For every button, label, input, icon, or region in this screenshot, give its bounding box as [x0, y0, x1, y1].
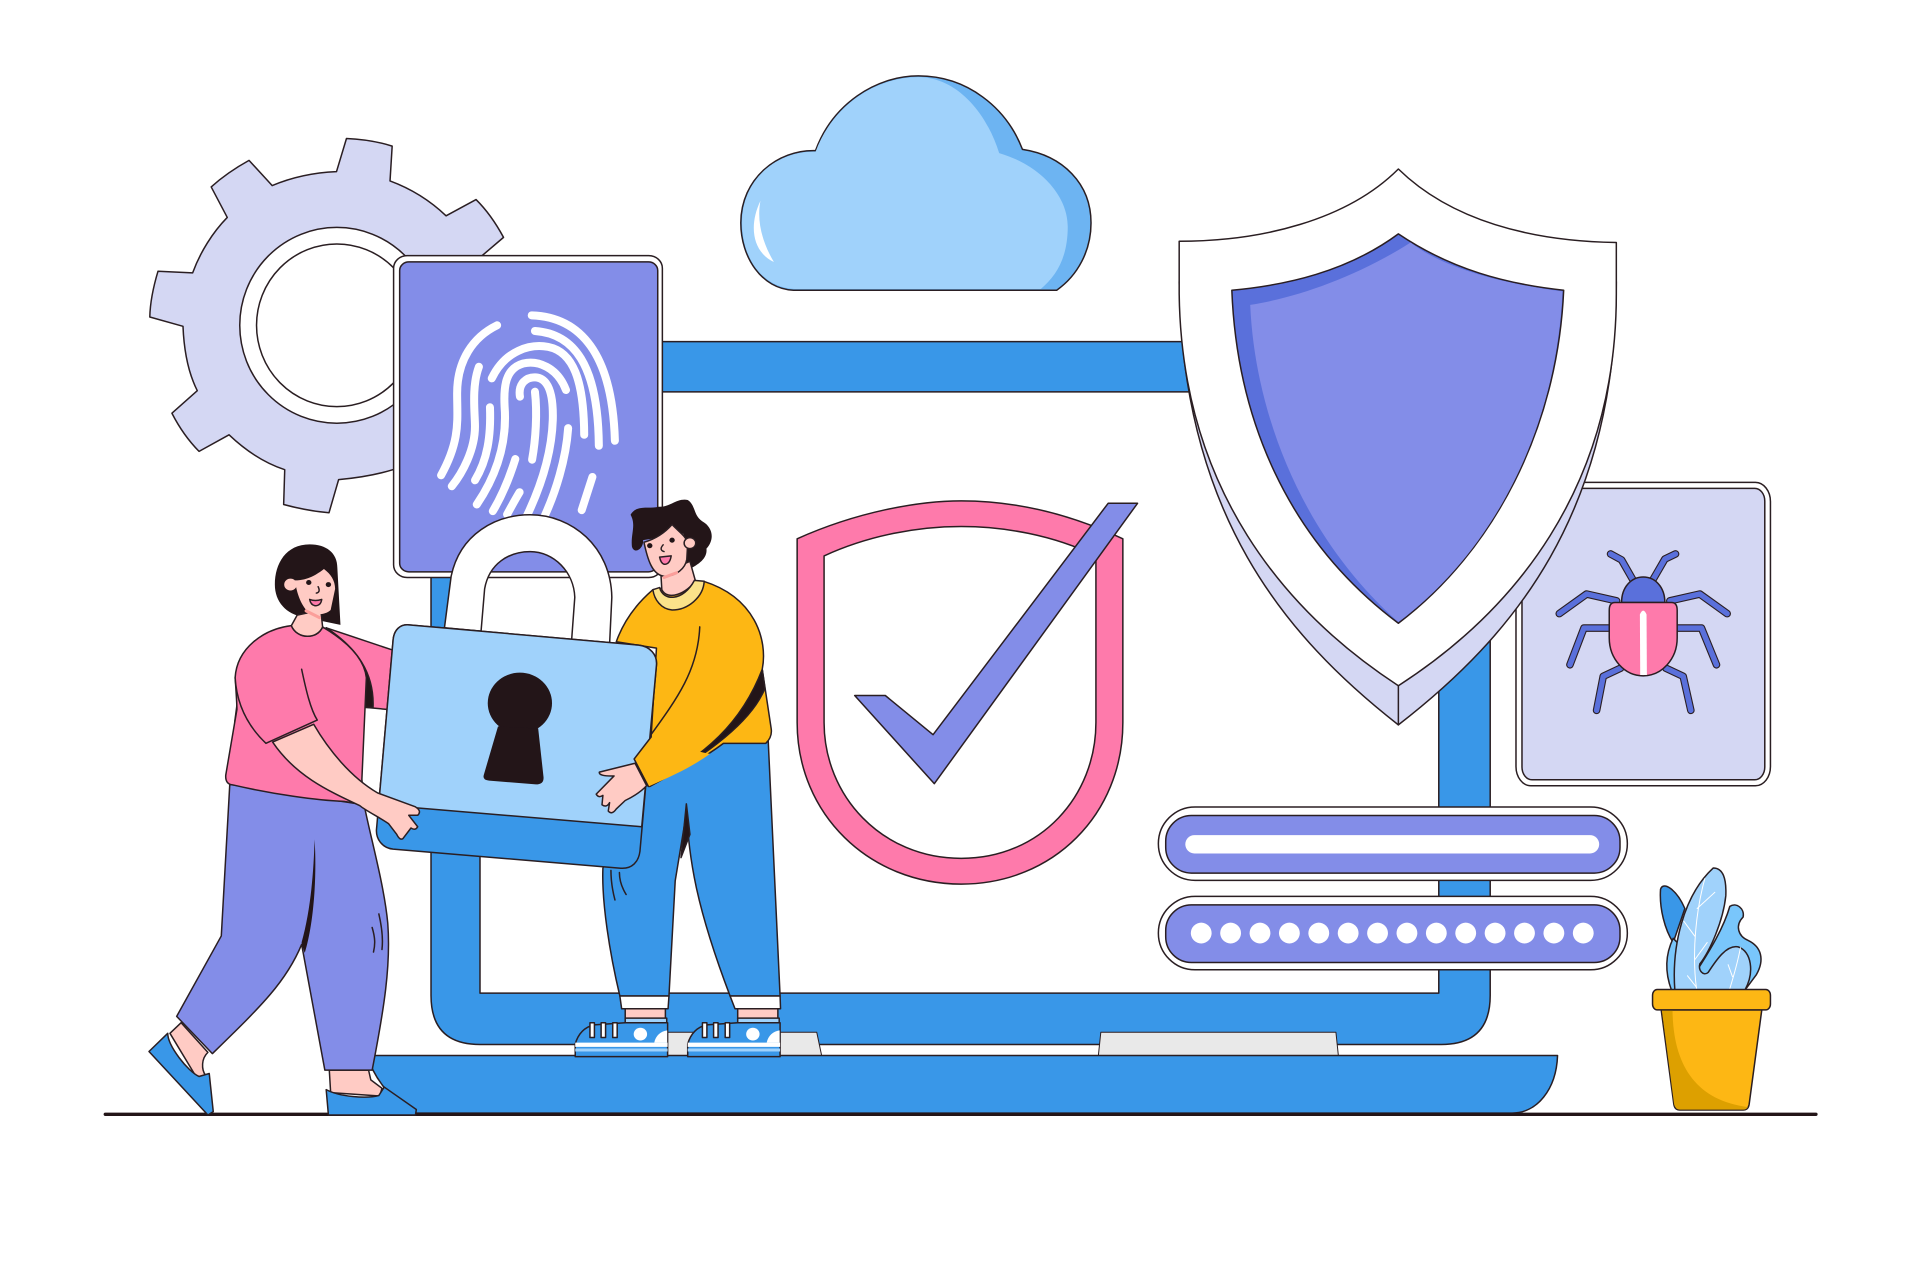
collar	[653, 580, 704, 610]
pink shield with check	[797, 501, 1138, 884]
trousers crease	[302, 839, 315, 953]
right shoe	[688, 1018, 780, 1057]
woman mouth	[310, 599, 322, 606]
shield seam	[1397, 686, 1399, 725]
pot body	[1661, 1010, 1762, 1110]
bug card inner	[1522, 488, 1765, 780]
woman neck	[291, 610, 323, 636]
potted plant	[1653, 868, 1770, 1110]
woman neck shadow	[306, 611, 319, 618]
cloud highlight	[754, 201, 774, 262]
laptop	[367, 342, 1558, 1113]
person: woman	[149, 544, 419, 1115]
person: woman back arm	[326, 628, 393, 709]
right foot skin	[329, 1070, 382, 1096]
woman eyes	[306, 580, 331, 587]
knee lines	[372, 914, 382, 952]
dark leaf	[1660, 886, 1685, 943]
fingerprint card outer	[394, 256, 662, 578]
shirt	[226, 626, 366, 805]
cloud front	[742, 77, 1068, 289]
gear and fingerprint card	[150, 138, 662, 578]
shield inner dark	[1232, 234, 1564, 623]
person: man trousers and sweater	[603, 581, 780, 996]
icon: bug	[1559, 554, 1727, 710]
large shield	[1179, 169, 1616, 725]
left shoe	[575, 1018, 668, 1057]
woman arm and hand	[273, 724, 419, 839]
right cuff	[730, 996, 781, 1009]
man ear	[684, 538, 696, 549]
bug body	[1609, 603, 1677, 676]
left foot skin	[170, 1023, 208, 1078]
front leaf	[1674, 868, 1751, 990]
gear	[150, 138, 504, 513]
trousers	[177, 784, 389, 1070]
bag strap	[650, 669, 765, 787]
gear hole	[257, 244, 417, 407]
check mark	[855, 503, 1138, 784]
woman ear	[284, 579, 297, 591]
pot rim	[1653, 989, 1770, 1010]
man face	[644, 524, 688, 576]
shield depth	[1179, 282, 1616, 725]
bug card	[1516, 482, 1770, 786]
bug legs	[1559, 554, 1727, 710]
cloud	[741, 76, 1091, 290]
padlock base	[376, 625, 657, 868]
man hand	[596, 763, 647, 813]
left shoe	[149, 1033, 213, 1115]
trouser wrinkles	[611, 870, 626, 900]
trousers crease	[681, 804, 690, 858]
bug card outer	[1516, 482, 1770, 786]
bug legs outline	[1559, 554, 1727, 710]
padlock shackle	[444, 515, 612, 644]
password field	[1158, 896, 1627, 970]
arm line	[634, 627, 700, 758]
sleeve	[235, 669, 317, 743]
sleeve	[634, 737, 710, 787]
bag strap	[235, 705, 266, 743]
pot shadow	[1662, 1010, 1748, 1110]
sweater	[616, 581, 771, 786]
left hinge	[667, 1032, 822, 1056]
left ankle	[625, 1009, 665, 1019]
right ankle	[738, 1009, 778, 1019]
ground line	[105, 1113, 1816, 1116]
shield inner light	[1250, 242, 1562, 622]
icon: fingerprint	[441, 315, 615, 516]
right shoe	[326, 1087, 416, 1115]
padlock body	[376, 625, 657, 868]
keyhole	[484, 673, 552, 784]
man hair	[631, 500, 712, 570]
man nose	[661, 545, 664, 552]
man trousers	[603, 737, 780, 996]
laptop screen frame	[431, 342, 1490, 1044]
leaf veins	[1684, 879, 1740, 989]
pink shield outline	[797, 501, 1123, 884]
right hinge	[1098, 1032, 1338, 1056]
gear ring	[240, 227, 434, 423]
bug stripe	[1640, 611, 1647, 675]
username field	[1158, 807, 1627, 880]
bug head	[1622, 577, 1665, 603]
shield rim	[1179, 169, 1616, 686]
man mouth	[660, 556, 671, 564]
woman nose	[316, 587, 319, 593]
person: man feet	[575, 996, 781, 1057]
fingerprint card inner	[400, 262, 658, 572]
man neck	[661, 561, 695, 595]
laptop base	[367, 1056, 1558, 1113]
people and padlock	[149, 500, 781, 1115]
medium leaf	[1667, 905, 1761, 990]
padlock face	[380, 625, 657, 827]
woman hair	[275, 544, 340, 625]
man eyes	[647, 538, 675, 548]
person: man upper	[596, 500, 712, 813]
left cuff	[620, 996, 669, 1009]
woman face	[295, 569, 335, 614]
cloud back	[741, 76, 1091, 290]
man neck shadow	[664, 573, 677, 577]
